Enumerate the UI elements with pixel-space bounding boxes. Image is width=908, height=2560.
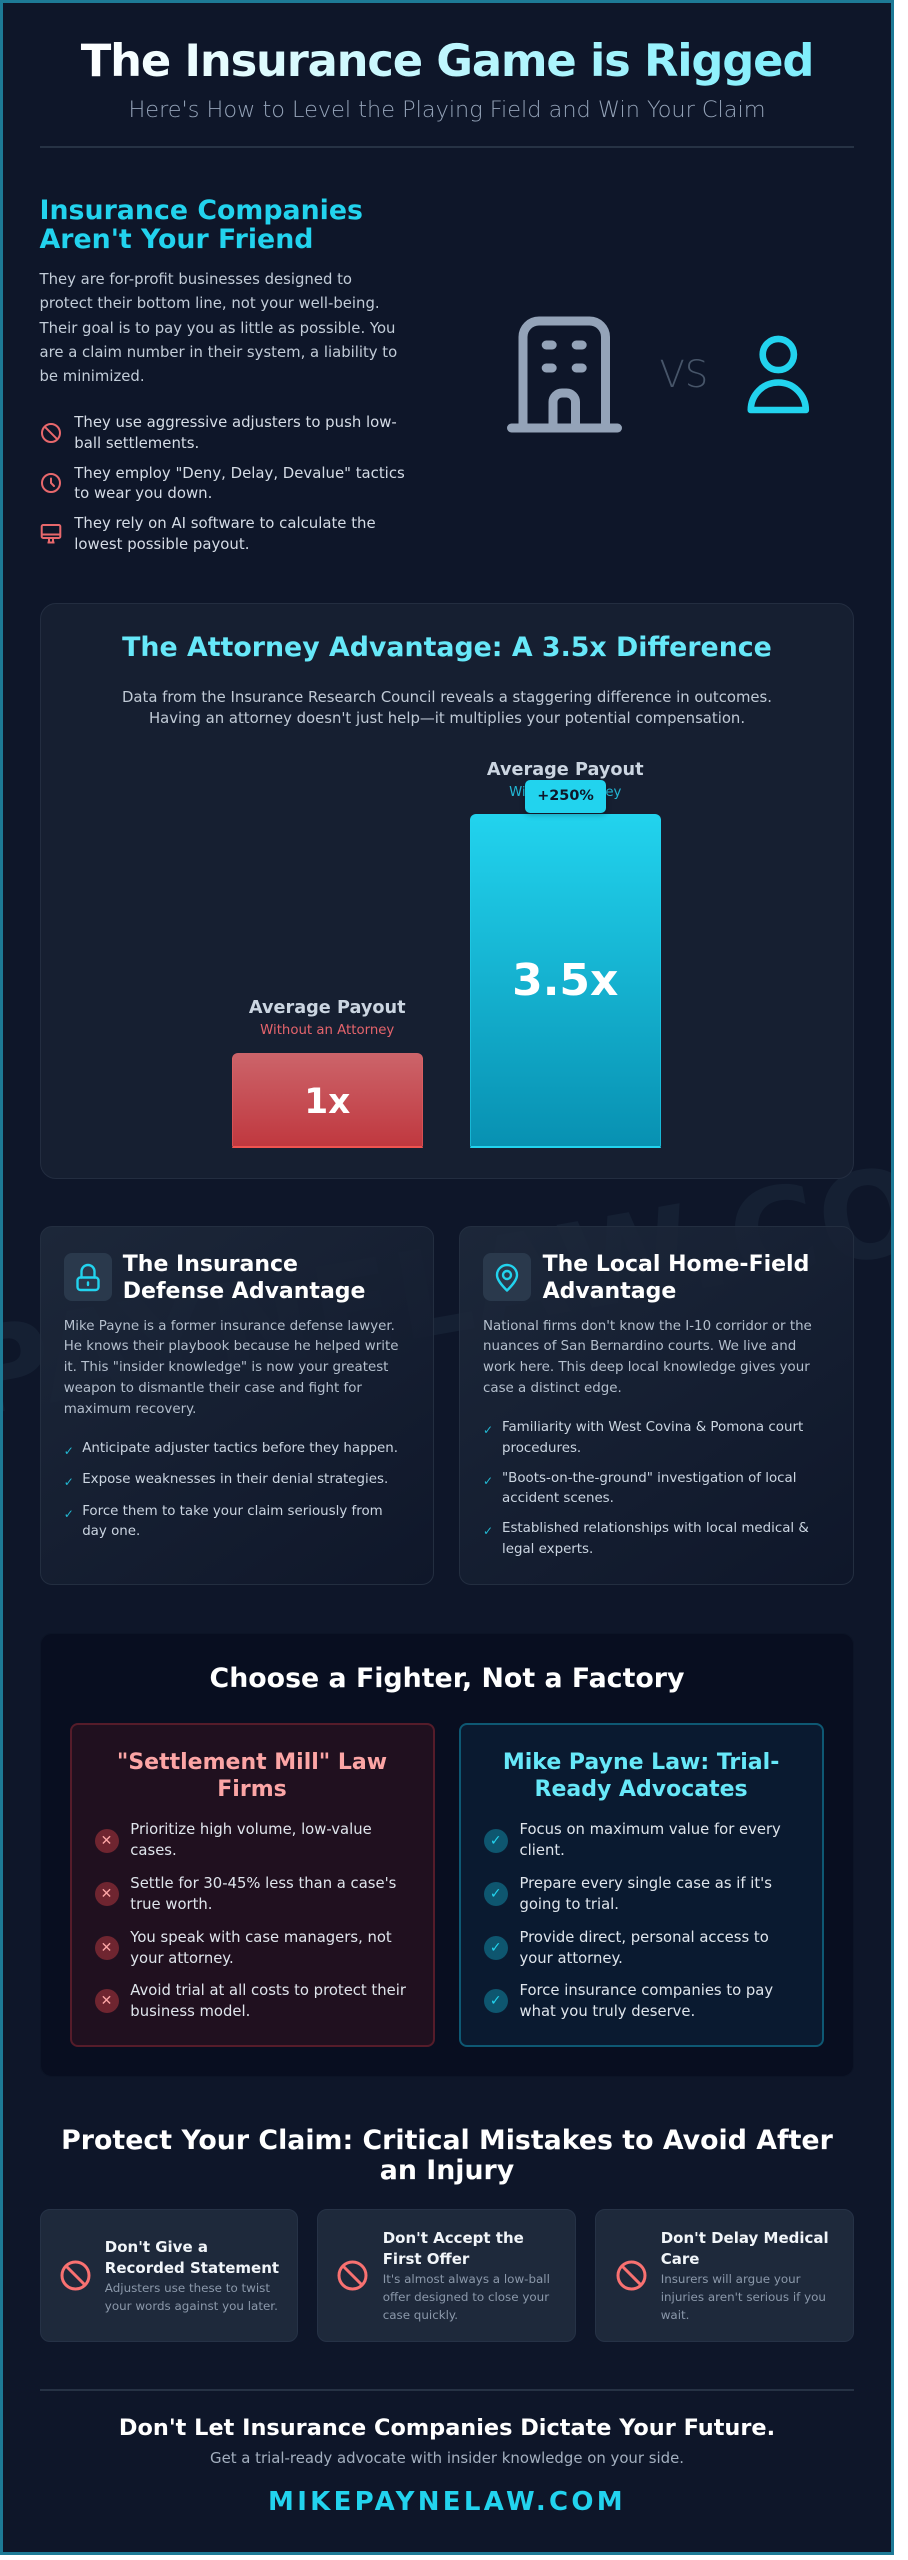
- checklist: procedures.: [502, 1441, 581, 1456]
- panel: choose a fighter: [40, 1633, 854, 2077]
- label: with attorney: [487, 760, 644, 800]
- bullet: deny delay devalue: They employ "Deny, Delay, Devalue" tactics: [74, 464, 405, 482]
- mike payne law list: Force insurance companies to pay: [519, 1982, 773, 1999]
- mistake text: your words against you later.: [105, 2299, 278, 2313]
- checklist: ✓: [483, 1423, 493, 1437]
- mistake text: Recorded Statement: [105, 2259, 279, 2277]
- checklist: legal experts.: [502, 1542, 593, 1557]
- checklist: Force them to take your claim seriously from: [82, 1504, 383, 1518]
- checklist: day one.: [82, 1524, 140, 1539]
- mike payne law list: Provide direct, personal access to: [519, 1928, 769, 1946]
- mistake text: [383, 2229, 550, 2322]
- panel: insurance defense advantage: [40, 1226, 434, 1585]
- icon: map pin: [483, 1253, 531, 1301]
- mike payne law list: ✓: [490, 1886, 502, 1902]
- mistakes heading: [61, 2124, 833, 2186]
- bullet: deny delay devalue: to wear you down.: [74, 484, 212, 502]
- card text: maximum recovery.: [64, 1402, 196, 1417]
- bullet: deny delay devalue: [74, 464, 405, 502]
- intro text: are a claim number in their system, a liability to: [40, 343, 397, 361]
- checklist: ✓: [64, 1474, 74, 1488]
- comparison card: settlement mill: [70, 1723, 434, 2047]
- icon: clock: [41, 473, 61, 493]
- bar: without attorney 1x: 1x: [304, 1082, 350, 1122]
- settlement mill list: Prioritize high volume, low-value: [130, 1821, 372, 1838]
- label: with attorney: With an Attorney: [509, 785, 621, 800]
- settlement mill heading: "Settlement Mill" Law: [117, 1750, 387, 1774]
- card heading: The Local Home-Field: [543, 1252, 809, 1276]
- mistake text: Insurers will argue your: [661, 2272, 801, 2286]
- mike payne law list: your attorney.: [519, 1950, 623, 1966]
- card text: weapon to dismantle their case and fight for: [64, 1381, 362, 1396]
- comparison heading: Choose a Fighter, Not a Factory: [210, 1663, 684, 1694]
- mike payne law heading: Mike Payne Law: Trial-: [503, 1750, 779, 1774]
- card text: National firms don't know the I-10 corridor or the: [483, 1318, 812, 1334]
- panel: local home-field advantage: [459, 1226, 854, 1585]
- intro text: protect their bottom line, not your well-being.: [40, 294, 380, 312]
- card text: nuances of San Bernardino courts. We live and: [483, 1339, 796, 1354]
- mike payne law list: what you truly deserve.: [519, 2003, 695, 2020]
- settlement mill list: ✕: [101, 1940, 112, 1956]
- title: The Insurance Game is Rigged: [81, 34, 813, 87]
- icon: ban: [616, 2260, 646, 2290]
- chart description: Data from the Insurance Research Council reveals a staggering difference in outcomes.: [122, 688, 772, 706]
- mistake text: [104, 2238, 279, 2313]
- card text: [483, 1318, 812, 1396]
- subtitle: Here's How to Level the Playing Field and Win Your Claim: [128, 97, 766, 123]
- label: with attorney: Average Payout: [487, 760, 644, 780]
- checklist: Anticipate adjuster tactics before they happen.: [82, 1440, 398, 1456]
- settlement mill list: Settle for 30-45% less than a case's: [130, 1875, 396, 1892]
- bar chart: [232, 760, 661, 1148]
- label: without attorney: Average Payout: [249, 998, 406, 1018]
- mistake text: case quickly.: [383, 2308, 458, 2322]
- mistake text: Don't Give a: [105, 2238, 208, 2256]
- settlement mill list: true worth.: [130, 1896, 212, 1913]
- section heading: insurance companies: [40, 195, 363, 255]
- card text: case a distinct edge.: [483, 1381, 622, 1396]
- mistake text: offer designed to close your: [383, 2290, 549, 2304]
- call to action heading: Don't Let Insurance Companies Dictate Your Future.: [119, 2415, 775, 2441]
- mistake card: first offer: [317, 2209, 576, 2342]
- mike payne law list: ✓: [490, 1993, 502, 2009]
- settlement mill list: ✕: [101, 1886, 112, 1902]
- mike payne law list: ✓: [490, 1940, 502, 1956]
- mistake text: Don't Delay Medical: [661, 2229, 829, 2247]
- mistake text: [661, 2229, 829, 2322]
- mike payne law list: Focus on maximum value for every: [519, 1821, 781, 1838]
- mistake text: Adjusters use these to twist: [105, 2281, 270, 2295]
- mistake card: delay care: [595, 2209, 854, 2342]
- checklist: accident scenes.: [502, 1491, 614, 1506]
- intro text: [39, 270, 397, 385]
- checklist: ✓: [64, 1506, 74, 1520]
- card heading: The Insurance: [123, 1252, 298, 1276]
- settlement mill list: your attorney.: [130, 1950, 234, 1966]
- mistake text: Don't Accept the: [383, 2229, 524, 2247]
- card text: work here. This deep local knowledge gives your: [483, 1360, 810, 1375]
- bar: with attorney 3.5x: 3.5x: [512, 955, 618, 1006]
- checklist: Familiarity with West Covina & Pomona court: [502, 1420, 803, 1435]
- mistakes heading: Protect Your Claim: Critical Mistakes to Avoid After: [61, 2124, 833, 2156]
- icon: person: [748, 336, 810, 414]
- intro text: be minimized.: [40, 367, 145, 385]
- settlement mill list: ✕: [101, 1833, 112, 1849]
- intro text: They are for-profit businesses designed to: [40, 270, 352, 288]
- mistake text: First Offer: [383, 2250, 469, 2268]
- settlement mill heading: Firms: [217, 1776, 287, 1802]
- mistake text: Care: [661, 2250, 699, 2268]
- VS label: VS: [660, 353, 708, 396]
- icon: ban: [338, 2260, 368, 2290]
- card heading: [542, 1252, 809, 1304]
- mistakes heading: an Injury: [380, 2155, 514, 2186]
- settlement mill list: [95, 1821, 406, 2020]
- bullet: aggressive adjusters: They use aggressive adjusters to push low-: [74, 413, 397, 431]
- mike payne law heading: [503, 1750, 779, 1802]
- mike payne law list: ✓: [490, 1833, 502, 1849]
- settlement mill heading: [117, 1750, 387, 1802]
- bullet: aggressive adjusters: [74, 413, 397, 452]
- checklist: [483, 1420, 809, 1557]
- badge: +250%: +250%: [537, 788, 594, 804]
- card text: Mike Payne is a former insurance defense lawyer.: [64, 1318, 395, 1334]
- bullet: AI software: They rely on AI software to calculate the: [74, 514, 376, 532]
- label: without attorney: [249, 998, 406, 1038]
- card text: He knows their playbook because he helped write: [64, 1339, 398, 1354]
- bullet: AI software: lowest possible payout.: [74, 535, 249, 553]
- mike payne law list: going to trial.: [519, 1896, 619, 1913]
- bar: with attorney 3.5x: [470, 814, 660, 1148]
- checklist: "Boots-on-the-ground" investigation of local: [502, 1470, 796, 1486]
- card heading: Defense Advantage: [123, 1278, 365, 1304]
- badge: +250%: [525, 780, 606, 813]
- checklist: [64, 1440, 398, 1539]
- chart description: [122, 688, 772, 726]
- icon: building: [507, 316, 622, 432]
- chart description: Having an attorney doesn't just help—it multiplies your potential compensation.: [149, 708, 745, 726]
- call to action text: Get a trial-ready advocate with insider knowledge on your side.: [210, 2449, 684, 2467]
- mike payne law list: [484, 1821, 781, 2020]
- chart heading: The Attorney Advantage: A 3.5x Difference: [122, 632, 772, 663]
- panel: attorney advantage: [40, 603, 854, 1179]
- settlement mill list: You speak with case managers, not: [130, 1928, 392, 1946]
- intro text: Their goal is to pay you as little as possible. You: [40, 319, 395, 337]
- label: without attorney: Without an Attorney: [260, 1023, 394, 1038]
- card text: [64, 1318, 398, 1417]
- mike payne law list: client.: [519, 1842, 565, 1859]
- mistake text: injuries aren't serious if you: [661, 2290, 826, 2304]
- icon: ban: [41, 423, 61, 443]
- icon: ban: [60, 2260, 90, 2290]
- comparison card: mike payne law: [459, 1723, 824, 2047]
- icon: lock: [64, 1253, 112, 1301]
- settlement mill list: Avoid trial at all costs to protect their: [130, 1982, 406, 1999]
- mistake text: It's almost always a low-ball: [383, 2272, 550, 2286]
- card heading: [122, 1252, 365, 1304]
- bar: without attorney 1x: [232, 1052, 422, 1148]
- website: MIKEPAYNELAW.COM: [268, 2486, 626, 2516]
- settlement mill list: ✕: [101, 1993, 112, 2009]
- checklist: Expose weaknesses in their denial strategies.: [82, 1472, 388, 1487]
- bullet: AI software: [74, 514, 376, 553]
- checklist: ✓: [64, 1444, 74, 1458]
- checklist: ✓: [483, 1524, 493, 1538]
- icon: computer: [40, 524, 62, 544]
- card heading: Advantage: [543, 1278, 676, 1304]
- settlement mill list: business model.: [130, 2003, 250, 2020]
- mike payne law heading: Ready Advocates: [535, 1776, 748, 1802]
- mike payne law list: Prepare every single case as if it's: [519, 1875, 772, 1892]
- checklist: Established relationships with local medical &: [502, 1521, 809, 1536]
- section heading: insurance companies: Aren't Your Friend: [40, 224, 313, 255]
- mistake text: wait.: [661, 2308, 689, 2322]
- section heading: insurance companies: Insurance Companies: [40, 195, 363, 226]
- settlement mill list: cases.: [130, 1842, 177, 1859]
- card text: it. This "insider knowledge" is now your greatest: [64, 1360, 388, 1375]
- mistake card: recorded statement: [40, 2209, 298, 2342]
- checklist: ✓: [483, 1474, 493, 1488]
- bullet: aggressive adjusters: ball settlements.: [74, 434, 199, 452]
